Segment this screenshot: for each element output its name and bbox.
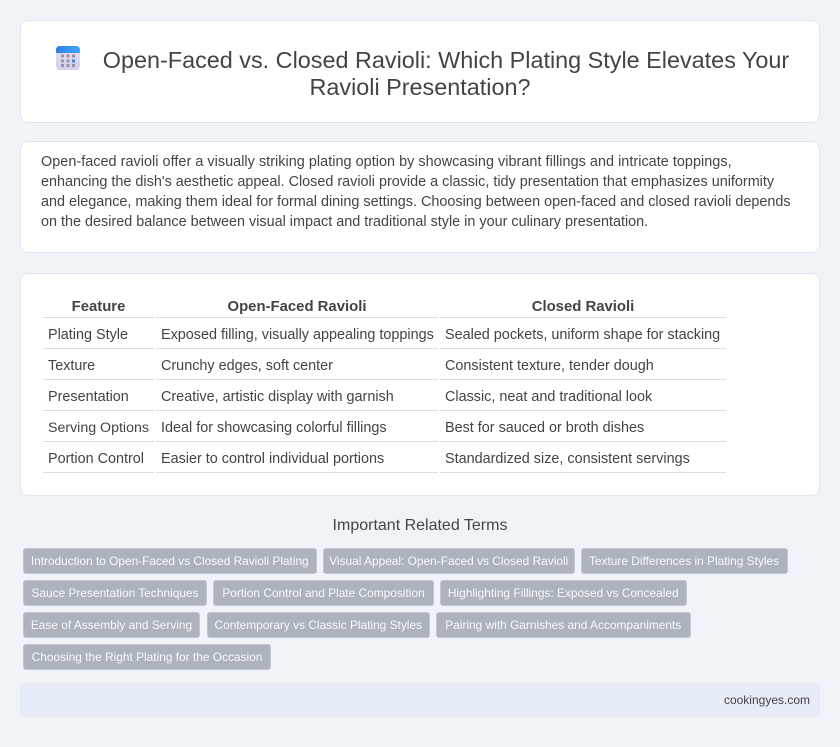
title bbox=[103, 47, 789, 100]
row: presentation: Presentation bbox=[48, 389, 129, 405]
row: texture: Consistent texture, tender dough bbox=[445, 358, 654, 374]
tag bbox=[440, 580, 686, 606]
text block: intro paragraph bbox=[41, 154, 791, 230]
tag: Portion Control and Plate Composition bbox=[222, 586, 425, 600]
row: serving options: Ideal for showcasing colorful fillings bbox=[161, 420, 387, 436]
tag: Choosing the Right Plating for the Occasion bbox=[32, 650, 262, 664]
row: presentation: Classic, neat and traditional look bbox=[445, 389, 652, 405]
heading: important related terms: Important Related Terms bbox=[333, 517, 507, 534]
row: serving options: Serving Options bbox=[48, 420, 149, 436]
row: texture bbox=[48, 358, 654, 374]
tag bbox=[213, 580, 434, 606]
row: portion control: Easier to control individual portions bbox=[161, 451, 384, 467]
footer bar bbox=[20, 683, 820, 717]
panel: intro paragraph card bbox=[20, 141, 820, 253]
row: plating style: Plating Style bbox=[48, 327, 128, 343]
tag bbox=[323, 548, 574, 574]
row: texture: Crunchy edges, soft center bbox=[161, 358, 333, 374]
table header: Open-Faced Ravioli bbox=[227, 299, 366, 315]
footer source text: cookingyes.com bbox=[724, 693, 810, 707]
tag bbox=[206, 612, 430, 638]
comparison table bbox=[43, 299, 726, 473]
row: serving options bbox=[48, 420, 644, 436]
panel: comparison table card bbox=[20, 273, 820, 496]
tag bbox=[436, 612, 690, 638]
tag: Introduction to Open-Faced vs Closed Ravioli Plating bbox=[31, 554, 309, 568]
tag bbox=[23, 548, 316, 574]
tag: Visual Appeal: Open-Faced vs Closed Ravioli bbox=[329, 554, 568, 568]
tag: Pairing with Garnishes and Accompaniments bbox=[445, 618, 681, 632]
icon: calendar bbox=[56, 46, 80, 70]
row: portion control bbox=[48, 451, 690, 467]
tag bbox=[23, 612, 200, 638]
table header bbox=[72, 299, 634, 315]
tag bbox=[23, 644, 271, 670]
row: texture: Texture bbox=[48, 358, 95, 374]
row: presentation bbox=[48, 389, 652, 405]
related terms tags bbox=[23, 548, 788, 670]
text block: intro paragraph: and elegance, making them ideal for formal dining settings. Choosing between open-faced and closed ravioli depends bbox=[41, 194, 791, 210]
row: portion control: Portion Control bbox=[48, 451, 144, 467]
text block: intro paragraph: Open-faced ravioli offer a visually striking plating option by showcasing vibrant fillings and intricate toppings, bbox=[41, 154, 732, 170]
text block: intro paragraph: enhancing the dish's aesthetic appeal. Closed ravioli provide a classic, tidy presentation that emphasizes uniformity bbox=[41, 174, 774, 190]
row: presentation: Creative, artistic display with garnish bbox=[161, 389, 394, 405]
row: portion control: Standardized size, consistent servings bbox=[445, 451, 690, 467]
row: plating style bbox=[48, 327, 720, 343]
row: plating style: Exposed filling, visually appealing toppings bbox=[161, 327, 434, 343]
table header: Closed Ravioli bbox=[532, 299, 634, 315]
tag: Sauce Presentation Techniques bbox=[31, 586, 199, 600]
text block: intro paragraph: on the desired balance between visual impact and traditional style in your culinary presentation. bbox=[41, 214, 648, 230]
tag: Ease of Assembly and Serving bbox=[31, 618, 192, 632]
table header: Feature bbox=[72, 299, 125, 315]
tag: Contemporary vs Classic Plating Styles bbox=[214, 618, 422, 632]
panel: title card bbox=[20, 20, 820, 123]
tag bbox=[23, 580, 207, 606]
tag bbox=[580, 548, 788, 574]
row: plating style: Sealed pockets, uniform shape for stacking bbox=[445, 327, 720, 343]
tag: Highlighting Fillings: Exposed vs Concealed bbox=[448, 586, 679, 600]
tag: Texture Differences in Plating Styles bbox=[589, 554, 779, 568]
row: serving options: Best for sauced or broth dishes bbox=[445, 420, 644, 436]
title: Ravioli Presentation? bbox=[309, 74, 531, 100]
title: Open-Faced vs. Closed Ravioli: Which Plating Style Elevates Your bbox=[103, 47, 789, 73]
